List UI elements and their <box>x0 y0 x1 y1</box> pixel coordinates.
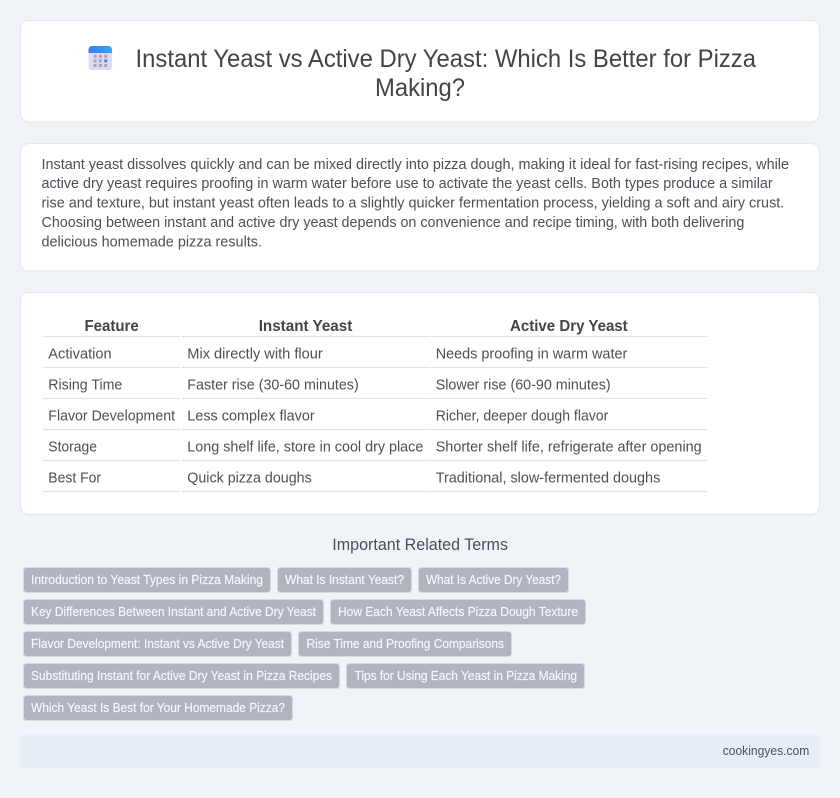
tag <box>24 632 292 656</box>
tag: Tips for Using Each Yeast in Pizza Making <box>354 669 577 683</box>
table row: rising time: Slower rise (60-90 minutes) <box>436 378 611 394</box>
table header row: Instant Yeast <box>259 318 353 335</box>
table row: flavor development: Flavor Development <box>48 408 175 424</box>
table row: storage: Long shelf life, store in cool dry place <box>187 440 423 456</box>
tag: Rise Time and Proofing Comparisons <box>306 637 504 651</box>
table row: activation: Needs proofing in warm water <box>436 346 627 362</box>
table row: flavor development: Less complex flavor <box>187 408 315 424</box>
tag group: related terms <box>24 568 586 720</box>
tag: Key Differences Between Instant and Active Dry Yeast <box>31 605 316 619</box>
table row: best for: Traditional, slow-fermented doughs <box>436 470 660 486</box>
table row: flavor development: Richer, deeper dough flavor <box>436 408 608 424</box>
icon: calendar <box>88 46 112 70</box>
tag <box>278 568 412 592</box>
table row: storage: Shorter shelf life, refrigerate after opening <box>436 440 702 456</box>
text block: introduction paragraph: Choosing between instant and active dry yeast depends on convenience and recipe timing, with both delivering <box>42 214 744 231</box>
tag <box>24 664 340 688</box>
tag <box>298 632 512 656</box>
text block: introduction paragraph: rise and texture, but instant yeast often leads to a slightly quicker fermentation process, yielding a soft and airy crust. <box>42 195 784 212</box>
table row: storage <box>48 440 702 456</box>
tag: Substituting Instant for Active Dry Yeast in Pizza Recipes <box>31 669 332 683</box>
tag <box>330 600 586 624</box>
panel: introduction text <box>20 144 820 271</box>
tag <box>346 664 584 688</box>
text block: introduction paragraph: active dry yeast requires proofing in warm water before use to activate the yeast cells. Both types produce a similar <box>42 175 773 192</box>
title: Making? <box>375 75 465 102</box>
tag <box>24 568 270 592</box>
tag <box>418 568 568 592</box>
panel: title card <box>20 20 820 122</box>
table row: best for: Best For <box>48 470 101 486</box>
title <box>136 46 756 102</box>
tag: What Is Active Dry Yeast? <box>426 573 561 587</box>
table row: rising time <box>48 378 611 394</box>
table row: rising time: Faster rise (30-60 minutes) <box>187 378 359 394</box>
table row: best for <box>48 470 660 486</box>
table row: activation <box>48 346 627 362</box>
tag: What Is Instant Yeast? <box>285 573 404 587</box>
panel: comparison table <box>20 292 820 514</box>
table header row: Feature <box>84 318 139 335</box>
tag <box>24 696 292 720</box>
tag: Which Yeast Is Best for Your Homemade Pizza? <box>31 701 285 715</box>
tag: Flavor Development: Instant vs Active Dry Yeast <box>31 637 284 651</box>
tag: Introduction to Yeast Types in Pizza Making <box>31 573 263 587</box>
table row: best for: Quick pizza doughs <box>187 470 312 486</box>
tag <box>24 600 324 624</box>
text block: introduction paragraph: delicious homemade pizza results. <box>42 233 262 250</box>
text block: introduction paragraph <box>42 156 789 250</box>
footer bar <box>20 734 820 768</box>
table row: flavor development <box>48 408 608 424</box>
text block: introduction paragraph: Instant yeast dissolves quickly and can be mixed directly into pizza dough, making it ideal for fast-rising recipes, while <box>42 156 789 173</box>
heading: related terms: Important Related Terms <box>332 536 508 554</box>
title: Instant Yeast vs Active Dry Yeast: Which Is Better for Pizza <box>136 46 756 73</box>
table header row: Active Dry Yeast <box>510 318 628 335</box>
footer source text: cookingyes.com <box>723 744 809 758</box>
tag: How Each Yeast Affects Pizza Dough Texture <box>338 605 578 619</box>
table row: activation: Mix directly with flour <box>187 346 323 362</box>
table row: activation: Activation <box>48 346 112 362</box>
table row: storage: Storage <box>48 440 97 456</box>
table header row <box>84 318 628 335</box>
table row: rising time: Rising Time <box>48 378 122 394</box>
